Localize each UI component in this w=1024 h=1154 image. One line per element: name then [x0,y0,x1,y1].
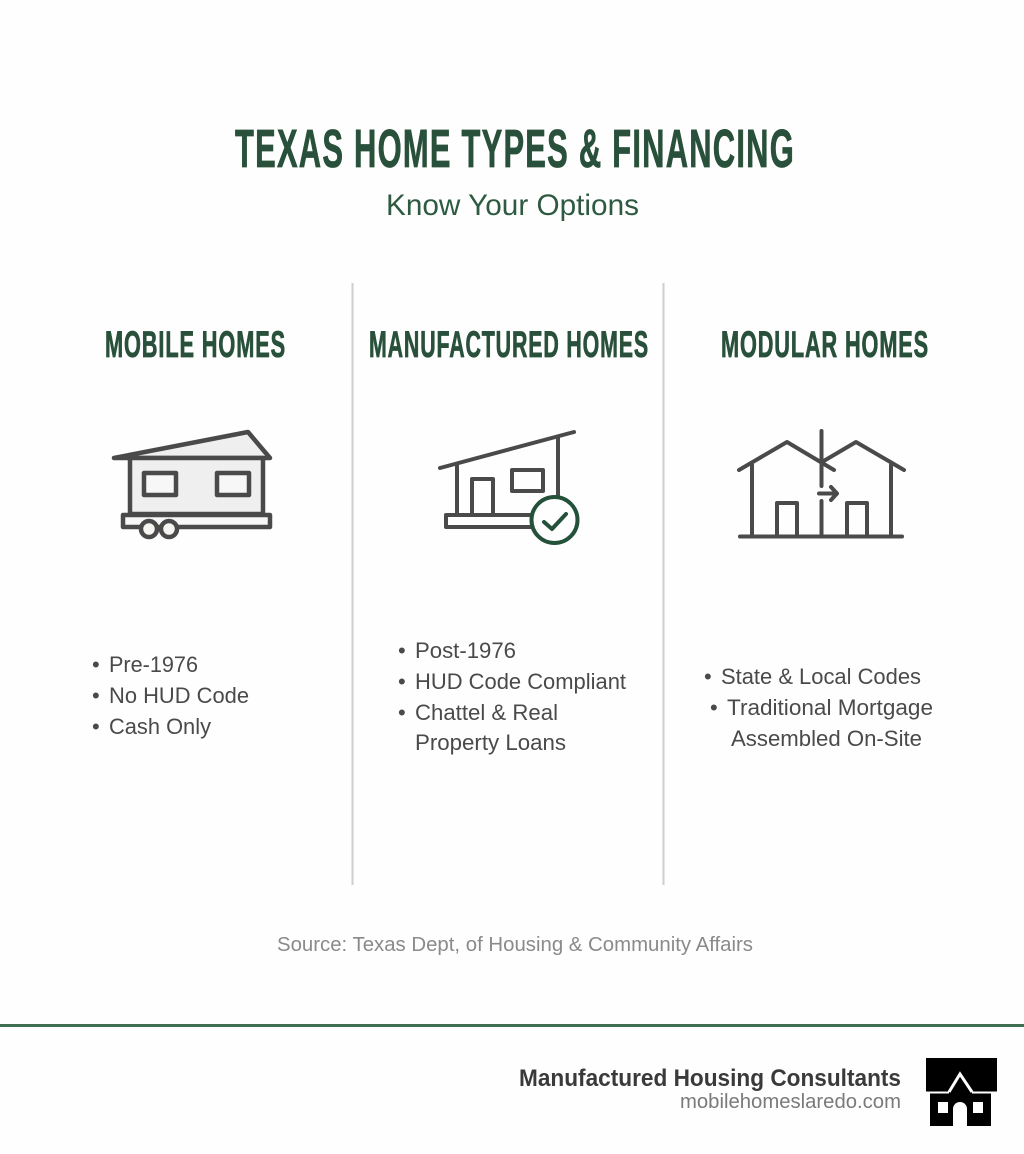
list: manufactured home facts: HUD Code Compliant [415,669,626,694]
list: mobile home facts [92,652,249,739]
panel: mobile homes [92,324,286,739]
heading: manufactured homes: MANUFACTURED HOMES [369,324,649,365]
list: manufactured home facts: • [398,700,406,725]
list: modular home facts: • [710,695,718,720]
icon: company logo [926,1058,997,1126]
list: mobile home facts: Cash Only [109,714,211,739]
icon: modular home sections joining [739,431,904,536]
list: mobile home facts: • [92,714,100,739]
list: mobile home facts: No HUD Code [109,683,249,708]
list: mobile home facts: • [92,652,100,677]
list: modular home facts: Traditional Mortgage [727,695,933,720]
panel: modular homes [704,324,933,751]
footer brand [519,1058,997,1126]
list: modular home facts: State & Local Codes [721,664,921,689]
list: mobile home facts: • [92,683,100,708]
list: manufactured home facts: Chattel & Real [415,700,558,725]
list: modular home facts [704,664,933,751]
website: mobilehomeslaredo.com [680,1091,901,1113]
list: manufactured home facts: Property Loans [415,730,566,755]
list: modular home facts: • [704,664,712,689]
heading: mobile homes: MOBILE HOMES [105,324,286,365]
company name: Manufactured Housing Consultants [519,1065,901,1092]
icon: manufactured home with check badge [440,432,578,543]
source note: Source: Texas Dept, of Housing & Community Affairs [277,934,753,956]
panel: manufactured homes [369,324,649,755]
list: manufactured home facts: Post-1976 [415,638,516,663]
list: mobile home facts: Pre-1976 [109,652,198,677]
subtitle: Know Your Options [386,189,639,222]
list: manufactured home facts: • [398,669,406,694]
icon: mobile home on trailer [114,432,270,537]
list: manufactured home facts [398,638,626,755]
list: modular home facts: Assembled On-Site [731,726,922,751]
list: manufactured home facts: • [398,638,406,663]
